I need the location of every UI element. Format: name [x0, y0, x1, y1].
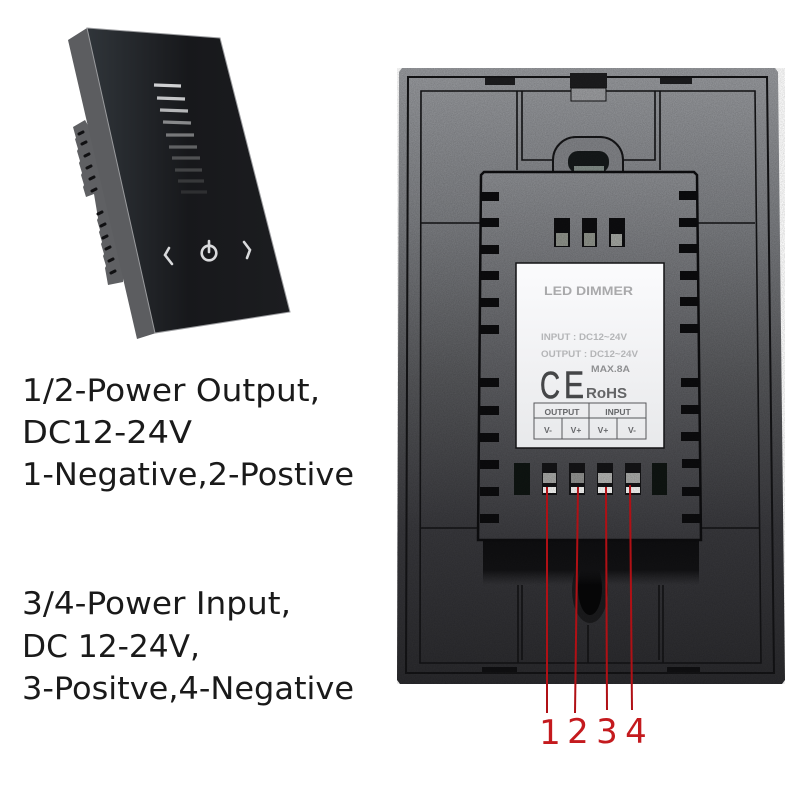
terminal numbers: 2: [567, 712, 589, 752]
terminal table: V-: [628, 425, 636, 435]
terminal table: V-: [544, 425, 552, 435]
module shadow: [483, 535, 699, 585]
label specs: MAX.8A: [591, 364, 631, 374]
text block: power output: 1-Negative,2-Postive: [22, 457, 354, 493]
label specs: [541, 332, 638, 374]
terminal table: OUTPUT: [545, 407, 580, 417]
back plate: [397, 68, 785, 684]
touch buttons: previous, power, next: [165, 241, 250, 264]
terminal numbers: 1: [539, 713, 561, 753]
product photo: front of touch dimmer: [68, 28, 290, 339]
rear module body: [478, 172, 701, 540]
text block: power input: DC 12-24V,: [22, 629, 200, 665]
grain texture: [397, 68, 785, 684]
label specs: INPUT : DC12~24V: [541, 332, 627, 342]
brightness bars: [154, 85, 207, 192]
text block: power output: DC12-24V: [22, 415, 192, 451]
plate recess lines: [406, 77, 774, 673]
pointer lines: [547, 485, 632, 713]
text block: power output: [22, 373, 354, 493]
terminal numbers: 4: [625, 712, 647, 752]
text block: power output: 1/2-Power Output,: [22, 373, 320, 409]
top notch: [570, 73, 607, 88]
side wall: [68, 28, 156, 339]
wiring callout lines and numbers: [539, 485, 647, 753]
label specs: OUTPUT : DC12~24V: [541, 349, 638, 359]
terminal numbers: [539, 712, 647, 753]
label title: LED DIMMER: [544, 284, 633, 298]
CE mark: E: [564, 365, 584, 407]
terminal table: INPUT: [605, 407, 632, 417]
bottom notches: [482, 667, 517, 672]
terminal table: V+: [598, 425, 608, 435]
terminal slots: [514, 463, 667, 495]
terminal table: [534, 403, 646, 439]
product label: [516, 263, 664, 448]
top mounting slot: [553, 137, 623, 173]
CE mark: [540, 365, 584, 407]
text block: power input: [22, 586, 354, 707]
side vent slots: [480, 191, 701, 523]
CE mark: C: [540, 365, 560, 407]
top vents: [554, 218, 625, 247]
terminal numbers: 3: [596, 712, 618, 752]
text block: power input: 3-Positve,4-Negative: [22, 671, 354, 707]
terminal table: V+: [571, 425, 581, 435]
product photo: back of dimmer: [397, 68, 785, 684]
mounting fins: [73, 120, 130, 285]
bottom mounting slot: [572, 557, 608, 623]
text block: power input: 3/4-Power Input,: [22, 586, 291, 622]
RoHS mark: RoHS: [586, 385, 627, 402]
glass face: [87, 28, 290, 333]
